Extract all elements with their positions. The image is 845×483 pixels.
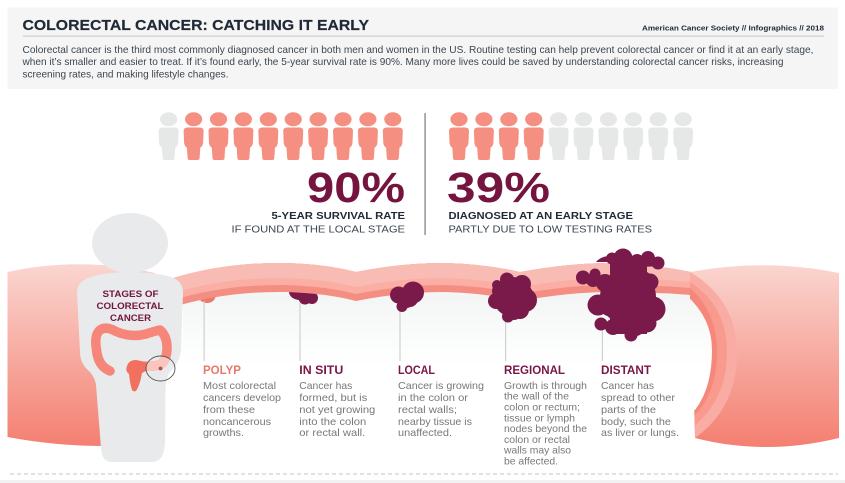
right colon opening [686, 265, 839, 447]
stage: local: rectal walls; [398, 405, 457, 416]
stage: local [390, 282, 484, 439]
stage: distant: as liver or lungs. [601, 428, 679, 439]
intro paragraph: when it’s smaller and easier to treat. If it’s found early, the 5-year survival rate is 90%. Many more lives could be saved by understanding colorectal cancer risks, increasing [22, 56, 784, 68]
intro paragraph: screening rates, and making lifestyle changes. [22, 68, 228, 80]
stage: distant: Cancer has [601, 381, 654, 392]
pictogram: 39 percent early diagnosis [449, 112, 693, 160]
stage: local: nearby tissue is [398, 417, 472, 428]
stage: regional: colon or rectum; [504, 402, 580, 414]
stat: 39 percent: 39% [447, 164, 550, 212]
pictogram: 90 percent survival [159, 112, 403, 160]
stage: regional: Growth is through [504, 381, 587, 392]
stage: distant: spread to other [601, 393, 676, 404]
regional tumor [488, 272, 537, 322]
stage: in situ: formed, but is [299, 393, 367, 404]
stat: 90 percent: 5-YEAR SURVIVAL RATE [272, 210, 405, 222]
stage: polyp: growths. [203, 428, 244, 439]
header panel [8, 8, 838, 89]
figure silhouette [77, 213, 183, 462]
stat divider [424, 113, 426, 235]
human figure [77, 213, 183, 462]
stage: regional: walls may also [503, 446, 571, 456]
intro paragraph: Colorectal cancer is the third most commonly diagnosed cancer in both men and women in the US. Routine testing can help prevent colorectal cancer or find it at an early stage, [22, 44, 814, 56]
stat: 90 percent [232, 164, 405, 236]
in situ tumor [289, 284, 318, 304]
heading: stages of colorectal cancer: CANCER [110, 313, 152, 323]
stage: polyp [203, 301, 281, 439]
stage: local: unaffected. [398, 428, 452, 439]
colon wall band [170, 263, 691, 308]
distant tumor [576, 248, 666, 342]
stat: 39 percent [447, 164, 652, 236]
stat: 39 percent: PARTLY DUE TO LOW TESTING RATES [448, 224, 652, 236]
stage: regional: nodes beyond the [504, 424, 587, 435]
stat: 90 percent: 90% [307, 164, 405, 212]
stage: local: in the colon or [398, 393, 469, 404]
stage: distant: body, such the [601, 417, 671, 428]
stage: distant [576, 248, 679, 439]
magnifier circle with polyp [146, 356, 175, 381]
polyp growth [198, 289, 216, 303]
stage: distant: parts of the [601, 405, 656, 416]
stat: 39 percent: DIAGNOSED AT AN EARLY STAGE [448, 210, 633, 222]
heading: stages of colorectal cancer [96, 289, 164, 323]
colon cross-section illustration [8, 263, 839, 447]
intro paragraph [22, 44, 813, 80]
stage: polyp: POLYP [203, 365, 241, 377]
stage: in situ: not yet growing [299, 405, 376, 416]
title: COLORECTAL CANCER: CATCHING IT EARLY [22, 17, 369, 34]
stage: regional [488, 272, 587, 468]
stage: local: Cancer is growing [398, 381, 484, 392]
stage: polyp: from these [203, 405, 255, 416]
heading: stages of colorectal cancer: COLORECTAL [96, 301, 164, 311]
stage: polyp: noncancerous [203, 417, 271, 428]
stage: in situ: into the colon [299, 417, 367, 428]
stage: in situ: or rectal wall. [299, 428, 365, 439]
stage: regional: REGIONAL [504, 365, 565, 377]
left colon opening [8, 264, 155, 446]
stat: 90 percent: IF FOUND AT THE LOCAL STAGE [232, 224, 405, 236]
stage: local: LOCAL [398, 365, 435, 377]
stage: in situ [299, 303, 376, 439]
stage: polyp: cancers develop [203, 393, 281, 404]
stage: in situ: Cancer has [299, 381, 352, 392]
stage: distant: DISTANT [601, 365, 651, 377]
icon: colon and rectum [96, 328, 167, 391]
local tumor [390, 282, 424, 312]
heading: stages of colorectal cancer: STAGES OF [102, 289, 159, 299]
stage: in situ: IN SITU [299, 365, 343, 377]
stage: regional: be affected. [504, 456, 558, 468]
stage: regional: colon or rectal [504, 435, 570, 446]
stage: regional: the wall of the [504, 392, 569, 402]
stage: regional: tissue or lymph [504, 414, 575, 424]
stage: polyp: Most colorectal [203, 381, 276, 392]
source credit: American Cancer Society // Infographics // 2018 [642, 24, 824, 32]
